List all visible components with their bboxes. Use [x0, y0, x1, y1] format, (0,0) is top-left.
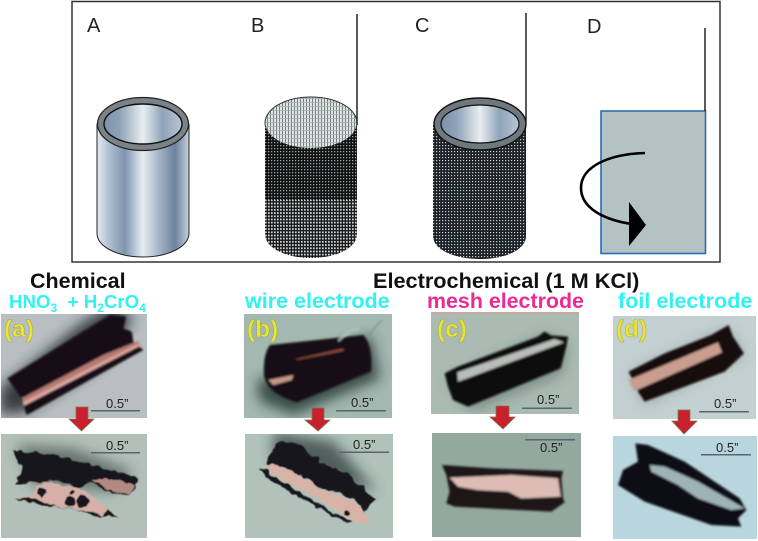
label A: A [87, 15, 101, 37]
label: acid mixture: CrO [104, 291, 139, 312]
cylinder C: tube wrapped with mesh and lead [433, 13, 526, 259]
scale bar (d) top: 0.5” [714, 396, 736, 411]
scale bar (a) bottom: 0.5” [106, 438, 128, 453]
label: acid mixture: HNO [9, 291, 51, 312]
heading: Chemical: Chemical [30, 269, 126, 293]
photo (a) before [0, 305, 147, 418]
label C: C [415, 15, 429, 37]
scale bar (d) top [699, 396, 749, 412]
scale bar (c) bottom [525, 439, 575, 455]
scale bar (c) top: 0.5” [537, 392, 559, 407]
cylinder B: wire mesh tube with lead [265, 14, 357, 258]
down arrow (c) [490, 406, 515, 429]
label: acid mixture: 4 [139, 301, 146, 315]
down arrow (d) [672, 410, 697, 434]
label: mesh electrode: mesh electrode [427, 289, 584, 313]
cylinder A: bare tube [97, 98, 189, 257]
scale bar (a) top [91, 396, 140, 412]
photo (d) after [613, 436, 757, 539]
foil electrode D with lead [601, 28, 706, 254]
panel letter (c): (c) [437, 316, 467, 343]
label: acid mixture: 2 [97, 301, 104, 315]
label B: B [251, 15, 264, 37]
scale bar (c) top [522, 392, 572, 409]
scale bar (b) bottom: 0.5” [353, 437, 375, 452]
schematic frame panel [72, 2, 720, 262]
scale bar (d) bottom [701, 440, 751, 456]
scale bar (a) top: 0.5” [106, 396, 128, 411]
label: wire electrode: wire electrode [244, 289, 390, 313]
down arrow (b) [305, 408, 330, 431]
panel letter (a): (a) [4, 316, 34, 343]
photo (c) after [432, 433, 581, 537]
label D: D [587, 16, 601, 38]
scale bar (d) bottom: 0.5” [716, 440, 738, 455]
arrow: wrapping direction [581, 153, 646, 246]
scale bar (b) bottom [339, 437, 389, 453]
scale bar (c) bottom: 0.5” [540, 440, 562, 455]
down arrow (a) [69, 407, 94, 431]
scale bar (b) top: 0.5” [351, 395, 373, 410]
photo (b) after [245, 432, 393, 538]
panel letter (b): (b) [247, 316, 278, 343]
photo (d) before [613, 316, 756, 419]
photo (b) before [244, 314, 392, 418]
label: foil electrode: foil electrode [618, 288, 752, 313]
scale bar (b) top [336, 395, 386, 412]
label: acid mixture: + H [57, 291, 97, 312]
scale bar (a) bottom [91, 438, 140, 454]
label: acid mixture: 3 [51, 301, 58, 315]
photo (a) after [1, 434, 147, 538]
photo (c) before [431, 311, 579, 414]
heading: Electrochemical: Electrochemical (1 M KCl) [373, 268, 639, 293]
panel letter (d): (d) [616, 316, 647, 343]
